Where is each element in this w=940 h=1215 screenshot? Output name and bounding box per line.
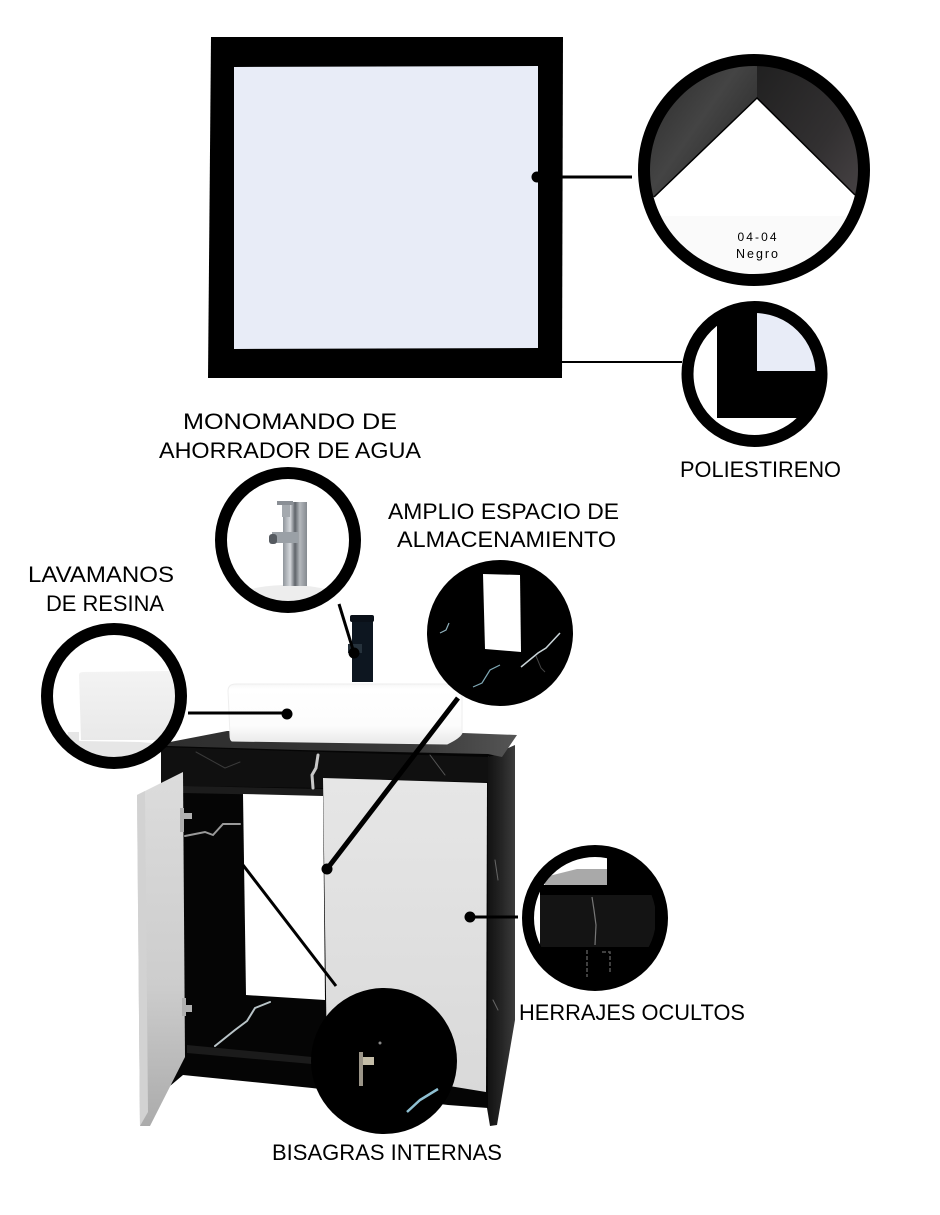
label: almacenamiento: AMPLIO ESPACIO DE: [388, 499, 619, 524]
callout: faucet detail: [215, 467, 361, 613]
connector: faucet: [339, 604, 360, 658]
connector: frame corner to material: [562, 361, 682, 363]
cabinet body: [161, 745, 502, 1108]
connector: storage: [322, 698, 458, 874]
label: lavamanos: [28, 562, 174, 616]
label: bisagras internas: BISAGRAS INTERNAS: [272, 1140, 502, 1165]
countertop: [167, 731, 517, 757]
top rail: [161, 747, 488, 795]
swatch code: 04-04: [738, 230, 777, 244]
callout: frame colour swatch: [640, 40, 870, 290]
connector: hardware: [464, 912, 518, 922]
mirror glass: [234, 66, 538, 349]
label: herrajes ocultos: HERRAJES OCULTOS: [519, 1000, 745, 1025]
swatch name: Negro: [736, 247, 778, 261]
label: monomando: [159, 409, 421, 463]
callout: hinge detail: [311, 988, 457, 1134]
callout: basin detail: [41, 623, 187, 770]
vanity cabinet: [137, 731, 517, 1126]
label: monomando: MONOMANDO DE: [183, 409, 397, 434]
left door edge: [137, 791, 148, 1126]
label: poliestireno: POLIESTIRENO: [680, 457, 841, 482]
label: lavamanos: DE RESINA: [46, 591, 164, 616]
black faucet: [348, 615, 374, 682]
bottom kick band: [187, 1045, 312, 1064]
basin: [228, 684, 462, 744]
callout: concealed hardware detail: [522, 845, 668, 991]
connector: hinges: [243, 865, 336, 986]
connector: basin: [188, 708, 292, 720]
opening: [243, 794, 325, 1000]
mirror with black frame: [208, 37, 563, 378]
right door: [323, 778, 487, 1092]
label: almacenamiento: [388, 499, 619, 552]
callout: storage detail: [427, 560, 573, 706]
left door: [137, 772, 185, 1126]
label: lavamanos: LAVAMANOS: [28, 562, 174, 587]
connector: mirror to frame finish: [532, 172, 632, 182]
rail lower band: [183, 786, 323, 796]
marble veins: [185, 752, 498, 1046]
hinges: [180, 808, 192, 1016]
label: almacenamiento: ALMACENAMIENTO: [397, 527, 616, 552]
label: monomando: AHORRADOR DE AGUA: [159, 438, 421, 463]
right side panel: [487, 745, 515, 1126]
callout: polystyrene frame corner: [680, 300, 832, 450]
